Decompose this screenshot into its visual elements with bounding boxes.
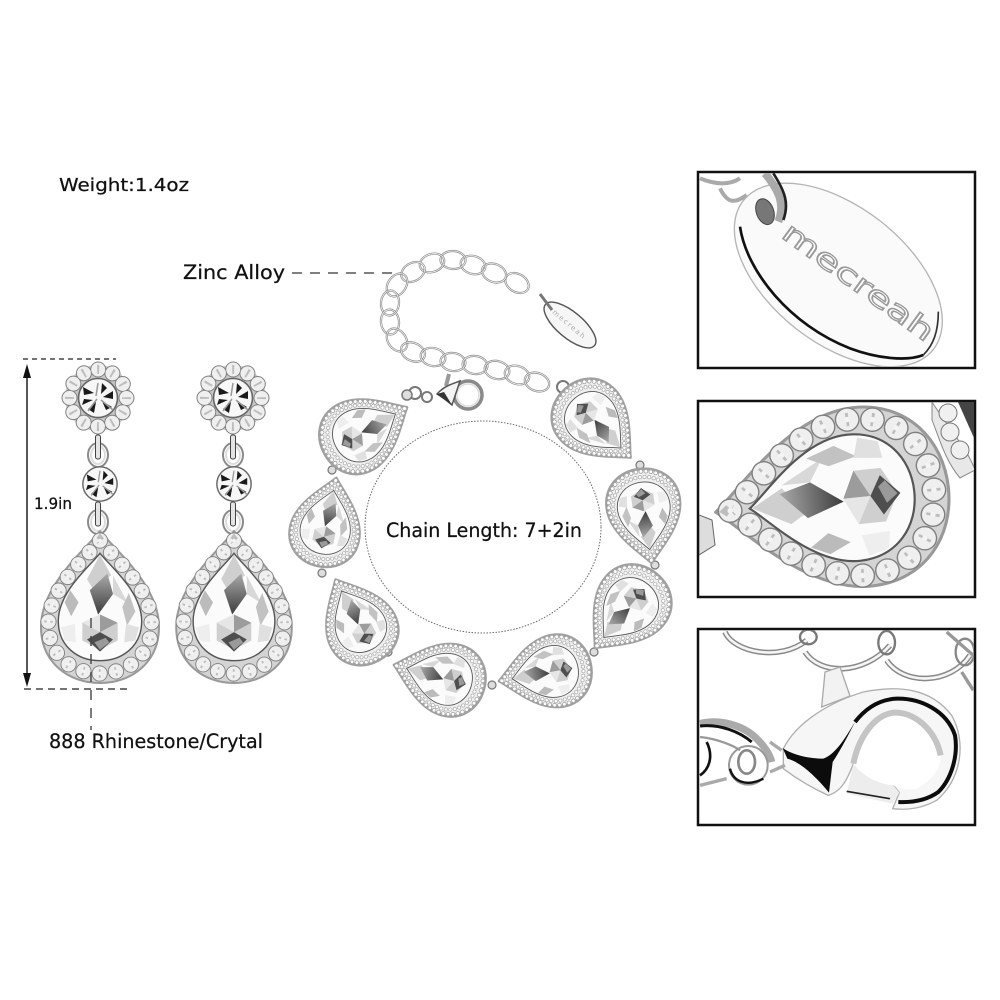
- panel: clasp detail: [698, 629, 975, 825]
- dimension line: earring height: [23, 359, 128, 689]
- leader line: rhinestone: [90, 618, 92, 730]
- bracelet end tag: mecreah: [551, 308, 586, 340]
- rhinestone label: 888 Rhinestone/Crytal: [49, 730, 263, 753]
- panel: gem detail: [698, 399, 975, 601]
- chain length label: Chain Length: 7+2in: [386, 519, 582, 542]
- panel: tag detail: [696, 170, 976, 370]
- bracelet gems: [284, 365, 688, 724]
- dotted circle: chain length: [365, 421, 601, 633]
- lobster clasp: [402, 374, 482, 409]
- bracelet extender chain: [380, 251, 569, 395]
- weight label: Weight:1.4oz: [59, 175, 189, 196]
- zinc alloy label: Zinc Alloy: [183, 261, 285, 284]
- leader line: zinc alloy: [292, 272, 402, 274]
- bracelet link connectors: [318, 461, 659, 689]
- earring: left: [41, 365, 159, 683]
- panel: tag detail: mecreah: [776, 216, 941, 348]
- height label: 1.9in: [34, 494, 72, 513]
- earring: right: [176, 365, 292, 683]
- bracelet end tag: [537, 294, 603, 356]
